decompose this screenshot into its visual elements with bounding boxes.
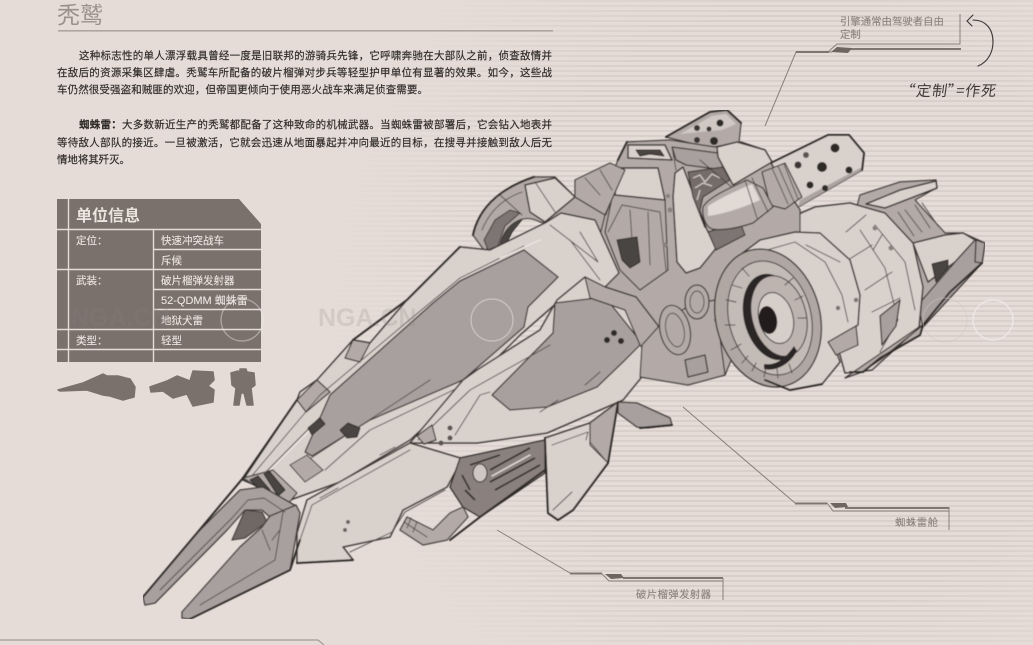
handwritten note with arrow (899, 15, 998, 101)
main body (595, 140, 800, 395)
callout: spider mine pod (683, 407, 949, 530)
table rows: 定位： (76, 234, 108, 247)
text block: intro paragraph: 这种标志性的单人漂浮载具曾经一度是旧联邦的游骑兵先锋，它呼啸奔驰在大部队之前，侦查敌情并 (79, 49, 552, 62)
rear engine cowl and thruster (785, 180, 985, 378)
callout text: 蜘蛛雷舱 (895, 516, 939, 529)
text block: spider mine paragraph: 蜘蛛雷：大多数新近生产的秃鹫都配备了这种致命的机械武器。当蜘蛛雷被部署后，它会钻入地表并 (79, 118, 552, 131)
panel: unit info table (57, 199, 261, 362)
underside machinery (400, 440, 545, 545)
window panel (615, 168, 665, 200)
table rows: 类型： (76, 334, 108, 347)
lower nose body (297, 443, 460, 563)
intake ring (700, 237, 836, 399)
table rows (76, 234, 248, 347)
watermarks (71, 298, 1013, 342)
bottom corner frame line (0, 640, 324, 645)
table rows: 地狱犬雷 (161, 314, 203, 327)
watermarks: NGA.CN (318, 304, 417, 332)
text block: spider mine paragraph (57, 118, 552, 166)
text block: intro paragraph (57, 49, 552, 96)
callout text: 引擎通常由驾驶者自由 (840, 15, 944, 28)
handwritten note with arrow: “定制”=作死 (899, 80, 998, 101)
callout text (840, 15, 944, 41)
text block: spider mine paragraph: 情地将其歼灭。 (57, 153, 130, 166)
gray armor panel (305, 250, 558, 456)
large strut (673, 167, 717, 273)
lower prong (182, 505, 300, 619)
illustration: Hellion vehicle (143, 110, 985, 619)
table rows: 轻型 (161, 334, 182, 347)
rear cannon (666, 110, 741, 148)
front cannon with collar (762, 135, 864, 209)
top right block (717, 142, 772, 185)
outer contour emphasis (243, 110, 982, 540)
main engine (700, 232, 860, 399)
callout: frag grenade launcher (497, 530, 723, 601)
text block: intro paragraph: 在敌后的资源采集区肆虐。秃鹫车所配备的破片榴弹对步兵等轻型护甲单位有显著的效果。如今，这些战 (57, 66, 552, 79)
front side blade (410, 277, 659, 446)
upper prong (143, 487, 296, 605)
front prongs (143, 470, 353, 619)
watermarks: NGA.CN (71, 304, 170, 332)
icon: size comparison silhouettes (58, 369, 255, 406)
prong gear cluster (640, 285, 725, 385)
callout: engine customization (765, 14, 961, 126)
table rows: 破片榴弹发射器 (161, 274, 235, 287)
exposed machinery (688, 167, 730, 228)
upper gray brace (672, 147, 724, 170)
table rows: 快速冲突战车 (161, 234, 224, 247)
table rows: 52-QDMM 蜘蛛雷 (161, 293, 248, 307)
text block: intro paragraph: 车仍然很受强盗和贼匪的欢迎，但帝国更倾向于使用恶火战车来满足侦查需要。 (57, 83, 428, 96)
table rows: 武装： (76, 274, 108, 287)
upper hull (243, 213, 619, 500)
callout text: 破片榴弹发射器 (636, 588, 712, 601)
top bracket (628, 145, 672, 160)
elbow pipe (703, 178, 773, 230)
text block: spider mine paragraph: 等待敌人部队的接近。一旦被激活，它就会迅速从地面暴起并冲向最近的目标，在搜寻并接触到敌人后无 (57, 136, 552, 149)
side fin (545, 402, 672, 520)
table heading: 单位信息 (76, 206, 140, 225)
title: 秃鹫 (57, 2, 103, 28)
callout text: 定制 (840, 28, 861, 41)
intake arch (473, 163, 625, 255)
table rows: 斥候 (161, 254, 182, 267)
